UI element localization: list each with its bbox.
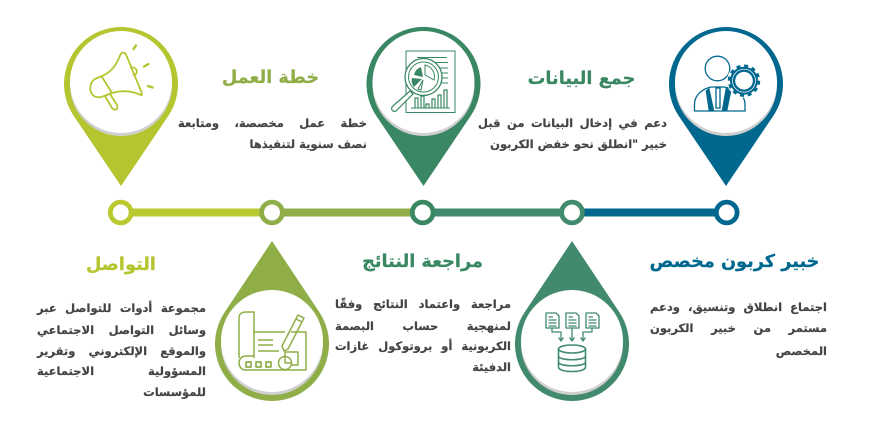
text block: data collection	[478, 116, 667, 152]
text block: results review	[335, 297, 511, 374]
pin: data collection	[669, 27, 783, 186]
text block: communication: والموقع الإلكتروني وتقرير	[37, 344, 206, 358]
text block: dedicated carbon expert	[650, 300, 827, 358]
pin: action plan	[215, 241, 329, 401]
heading: data collection: جمع البيانات	[528, 69, 635, 89]
text block: communication: مجموعة أدوات للتواصل عبر	[37, 301, 206, 315]
text block: communication	[36, 300, 206, 399]
text block: communication: وسائل التواصل الاجتماعي	[37, 323, 206, 337]
icon: megaphone	[90, 46, 152, 110]
text block: dedicated carbon expert: اجتماع انطلاق وتنسيق، ودعم	[650, 300, 827, 314]
icon: documents to database	[546, 313, 599, 372]
icon: report with magnifier	[392, 51, 455, 112]
text block: action plan: خطة عمل مخصصة، ومتابعة	[178, 116, 367, 130]
text block: data collection: دعم في إدخال البيانات من قبل	[478, 116, 667, 130]
heading: action plan: خطة العمل	[222, 68, 319, 88]
icon: blueprint and pencil	[239, 312, 306, 370]
text block: data collection: خبير "انطلق نحو خفض الكربون	[490, 137, 667, 151]
text block: dedicated carbon expert: المخصص	[776, 344, 827, 358]
text block: results review: الكربونية أو بروتوكول غازات	[335, 339, 511, 353]
heading: dedicated carbon expert: خبير كربون مخصص	[650, 252, 819, 272]
text block: action plan	[178, 116, 367, 151]
text block: results review: مراجعة واعتماد النتائج وفقًا	[335, 297, 511, 311]
text block: action plan: نصف سنوية لتنفيذها	[250, 137, 367, 151]
text block: results review: الدفيئة	[472, 360, 511, 374]
text block: dedicated carbon expert: مستمر من خبير الكربون	[650, 321, 827, 335]
heading: communication: التواصل	[86, 255, 156, 275]
text block: communication: المسؤولية الاجتماعية	[37, 364, 206, 378]
timeline	[110, 202, 737, 223]
heading: results review: مراجعة النتائج	[362, 252, 483, 272]
text block: results review: لمنهجية حساب البصمة	[335, 319, 511, 333]
icon: expert with gear	[694, 56, 761, 111]
pin: results review	[366, 27, 480, 186]
pin: communication	[64, 27, 178, 186]
text block: communication: للمؤسسات	[143, 385, 206, 399]
pin: dedicated carbon expert	[515, 241, 629, 401]
